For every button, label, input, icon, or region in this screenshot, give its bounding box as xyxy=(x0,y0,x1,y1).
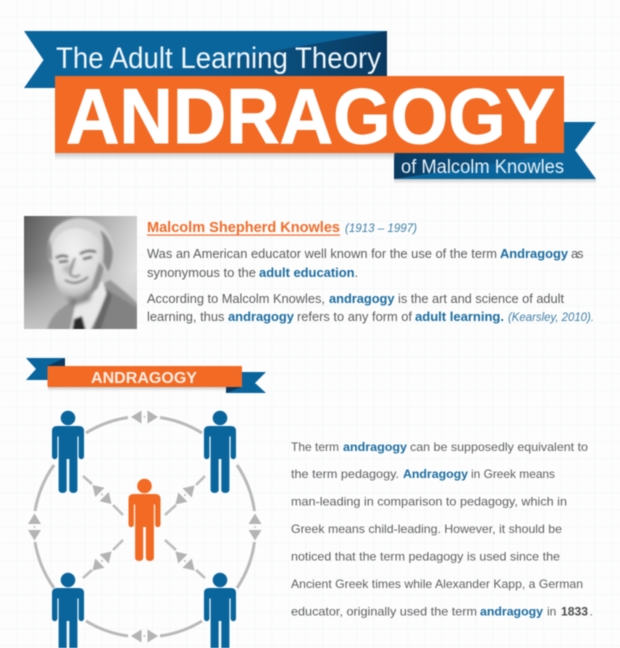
connecting circle arcs xyxy=(35,418,254,636)
person: top right xyxy=(204,411,236,493)
ribbon: orange main xyxy=(55,76,564,160)
andragogy description paragraph: The term xyxy=(291,440,339,454)
paragraph two: andragogy xyxy=(329,291,395,306)
double arrows xyxy=(28,410,262,642)
subtitle: of Malcolm Knowles: of Malcolm Knowles xyxy=(401,157,564,178)
paragraph one: . xyxy=(354,265,358,280)
network diagram xyxy=(28,410,262,648)
paragraph one: adult education xyxy=(259,265,355,280)
ribbon label: ANDRAGOGY xyxy=(91,370,197,387)
andragogy description paragraph: . xyxy=(590,605,593,619)
person: bottom right xyxy=(204,573,236,648)
shirt xyxy=(70,281,107,331)
ribbon tail left xyxy=(26,358,65,380)
paragraph two: learning, thus xyxy=(147,309,225,324)
paragraph one: Was an American educator well known for the use of the term xyxy=(147,246,497,261)
face xyxy=(52,228,103,299)
hair xyxy=(48,218,114,272)
andragogy description paragraph: noticed that the term pedagogy is used since the xyxy=(291,550,560,564)
life dates: (1913 – 1997) xyxy=(345,221,417,235)
person: center orange xyxy=(128,479,160,561)
andragogy description paragraph: Andragogy xyxy=(403,467,468,481)
paragraph two: (Kearsley, 2010). xyxy=(508,310,594,324)
ribbon: top blue xyxy=(24,31,387,88)
person: top left xyxy=(52,411,84,493)
andragogy description paragraph: in xyxy=(547,605,556,619)
tie xyxy=(72,316,86,331)
section ribbon: ANDRAGOGY xyxy=(26,358,266,393)
andragogy description paragraph: Greek means child-leading. However, it should be xyxy=(291,522,562,536)
paragraph two: andragogy xyxy=(228,309,295,324)
person: bottom left xyxy=(52,573,84,648)
paragraph one: synonymous to the xyxy=(147,265,256,280)
ribbon body xyxy=(48,366,242,391)
paragraph two: adult learning. xyxy=(415,309,504,324)
andragogy description paragraph: andragogy xyxy=(343,440,407,454)
title: ANDRAGOGY: ANDRAGOGY xyxy=(66,72,555,160)
paragraph one: as xyxy=(571,246,584,261)
andragogy description paragraph: can be supposedly equivalent to xyxy=(410,440,588,454)
paragraph two: According to Malcolm Knowles, xyxy=(147,291,325,306)
andragogy description paragraph: man-leading in comparison to pedagogy, which in xyxy=(291,495,567,509)
ribbon: lower right blue xyxy=(394,122,596,184)
paragraph two: refers to any form of xyxy=(297,309,412,324)
andragogy description paragraph: Ancient Greek times while Alexander Kapp, a German xyxy=(291,577,583,591)
andragogy description paragraph: 1833 xyxy=(561,605,588,619)
diagonal connector lines xyxy=(83,476,205,578)
andragogy description paragraph: educator, originally used the term xyxy=(291,605,477,619)
andragogy description paragraph: andragogy xyxy=(480,605,543,619)
paragraph two: is the art and science of adult xyxy=(398,291,564,306)
name heading: Malcolm Shepherd Knowles xyxy=(147,220,340,236)
andragogy description paragraph: in Greek means xyxy=(471,467,555,481)
ribbon tail right xyxy=(226,372,266,393)
portrait photo of Malcolm Knowles xyxy=(24,216,139,331)
paragraph two xyxy=(147,291,594,324)
suit xyxy=(47,280,139,331)
title banner xyxy=(24,31,596,184)
biography text xyxy=(147,220,594,324)
paragraph one xyxy=(147,246,584,280)
andragogy description paragraph: the term pedagogy. xyxy=(291,467,399,481)
andragogy description paragraph xyxy=(291,440,593,619)
paragraph one: Andragogy xyxy=(500,246,569,261)
subtitle: The Adult Learning Theory: The Adult Learning Theory xyxy=(56,42,381,75)
